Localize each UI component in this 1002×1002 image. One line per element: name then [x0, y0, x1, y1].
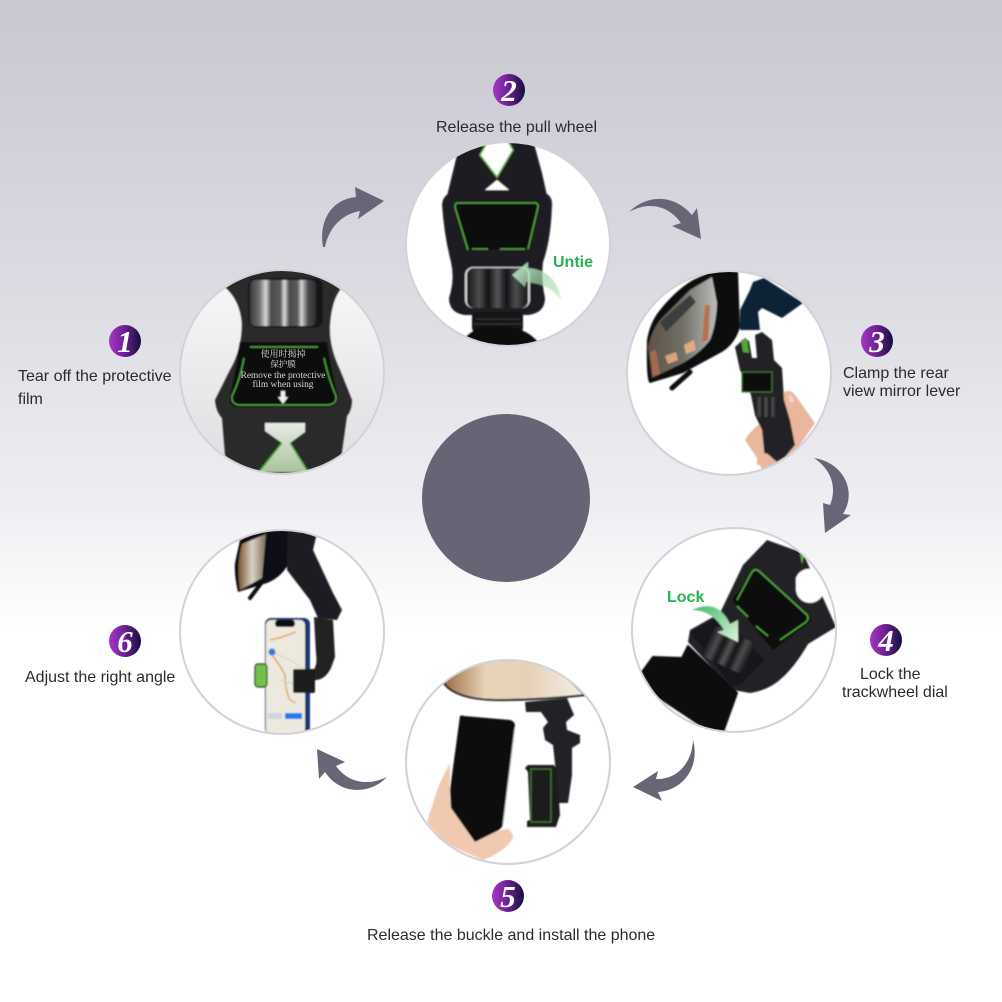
arrow: step 2 to 3 — [629, 199, 701, 239]
nail and finger — [788, 395, 794, 403]
label text on film: 使用时揭掉 — [260, 348, 306, 359]
label text on film: Remove the protective — [241, 371, 325, 381]
holder — [525, 765, 560, 827]
base — [642, 646, 737, 732]
badge 6 — [109, 624, 141, 659]
nub — [250, 582, 262, 598]
green clamp — [255, 664, 267, 687]
label panel — [230, 342, 338, 407]
badge 4: 4 — [877, 623, 894, 658]
thumb and palm — [745, 391, 815, 465]
hand — [427, 763, 513, 860]
green tip — [800, 554, 804, 564]
caption: step 4 — [842, 666, 948, 701]
holder body — [215, 262, 352, 480]
caption: step 6: Adjust the right angle — [25, 669, 175, 686]
badge 2 — [493, 73, 525, 108]
lower arm — [312, 617, 335, 680]
arrow: step 5 to 6 — [317, 749, 387, 790]
caption: step 1: Tear off the protective — [18, 368, 172, 385]
caption: step 4: trackwheel dial — [842, 684, 948, 701]
badge 5: 5 — [500, 879, 516, 914]
map routes — [270, 632, 296, 703]
holder body — [688, 540, 836, 693]
green frame — [737, 570, 808, 640]
clamp notch — [794, 568, 824, 604]
caption: step 3: view mirror lever — [843, 383, 961, 400]
screen — [732, 570, 812, 650]
badge 4 — [870, 623, 902, 658]
mirror glass — [238, 534, 266, 590]
badge 5 — [492, 879, 524, 914]
device screen — [742, 372, 772, 392]
phone screen — [266, 620, 305, 734]
arrow: step 4 to 5 — [633, 740, 695, 801]
panel: step 5 photo, install phone — [406, 655, 610, 864]
jaw opening — [480, 141, 513, 177]
mirror glass — [648, 277, 717, 378]
caption: step 2: Release the pull wheel — [436, 119, 597, 136]
badge 6: 6 — [117, 624, 133, 659]
panel: step 1 photo, protective film — [180, 262, 384, 480]
arrow: step 1 to 2 — [322, 187, 384, 247]
mirror — [443, 655, 585, 700]
clamp jaws — [446, 143, 548, 195]
green jaw — [741, 339, 749, 353]
black clamp — [293, 669, 315, 693]
screen green frame — [455, 203, 538, 250]
panel: step 6 photo, adjust angle — [180, 530, 384, 734]
map button — [285, 713, 302, 719]
green arrow — [692, 606, 738, 642]
wheel — [704, 626, 753, 673]
device — [735, 332, 795, 463]
device wheel — [755, 397, 777, 417]
panel: step 2 photo, release wheel — [406, 140, 610, 352]
holder green lines — [531, 769, 551, 822]
label text on film: film when using — [253, 379, 314, 390]
arrow on label — [278, 391, 288, 404]
badge 1 — [109, 324, 141, 359]
caption: step 3 — [843, 365, 961, 400]
caption: step 1 — [18, 368, 172, 408]
arrow: step 3 to 4 — [814, 458, 851, 533]
head — [442, 192, 552, 315]
panel: step 4 photo, lock dial — [632, 528, 840, 732]
mirror nub — [672, 372, 690, 388]
phone — [265, 618, 310, 734]
neck and base — [472, 312, 523, 332]
mirror housing — [647, 271, 740, 383]
label text on film: 保护膜 — [270, 359, 296, 369]
phone notch — [275, 620, 295, 627]
caption: step 3: Clamp the rear — [843, 365, 949, 382]
green arrow — [512, 262, 561, 300]
pull wheel — [248, 278, 323, 328]
caption: step 4: Lock the — [860, 666, 921, 683]
Untie label: Untie — [553, 254, 593, 271]
badge 2: 2 — [500, 73, 517, 108]
map pin — [268, 648, 276, 656]
mount — [525, 698, 580, 803]
badge 3 — [861, 324, 893, 359]
center circle — [422, 414, 590, 582]
black screen — [455, 203, 538, 250]
wheel — [465, 267, 530, 308]
badge 1: 1 — [117, 324, 133, 359]
mount arm — [740, 278, 803, 330]
label text on film — [241, 348, 325, 390]
caption: step 5: Release the buckle and install the phone — [367, 927, 655, 944]
wheel housing — [690, 614, 765, 686]
mirror housing — [235, 530, 288, 592]
upper arm — [287, 530, 342, 620]
hourglass opening — [259, 423, 308, 472]
caption: step 1: film — [18, 391, 43, 408]
green outline on label — [232, 347, 336, 405]
badge 3: 3 — [868, 324, 885, 359]
phone — [450, 716, 515, 842]
Lock label: Lock — [667, 589, 704, 606]
panel: step 3 photo, clamp mirror lever — [627, 271, 831, 475]
